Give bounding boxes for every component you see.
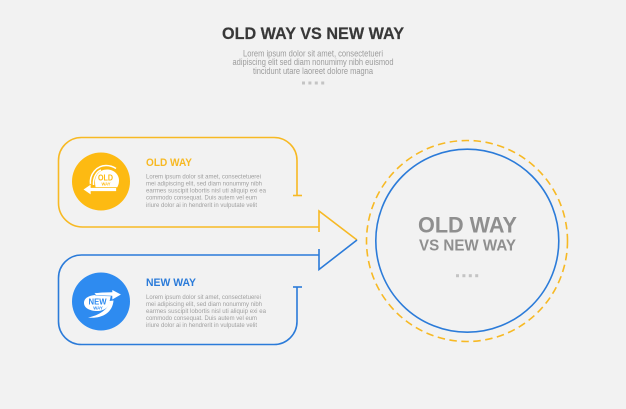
subtitle text block: tincidunt utare laoreet dolore magna <box>253 66 373 76</box>
icon: old way: OLD <box>98 173 113 182</box>
title: OLD WAY VS NEW WAY <box>222 24 405 43</box>
new way body text <box>146 294 266 329</box>
icon: old way: WAY <box>102 182 111 186</box>
old way body text: Lorem ipsum dolor sit amet, consectetuerei <box>146 174 261 180</box>
new way body text: commodo consequat. Duis autem vel eum <box>146 315 257 322</box>
old way body text: commodo consequat. Duis autem vel eum <box>146 195 257 202</box>
center label: OLD WAY <box>418 212 517 238</box>
solid inner circle <box>376 149 559 332</box>
new way body text: earmes suscipit lobortis nisl uti aliquip exi ea <box>146 308 266 315</box>
new way body text: mei adipiscing elit, sed diam nonummy nibh <box>146 301 262 308</box>
old way outline connector <box>58 138 319 227</box>
icon: old way <box>72 152 130 210</box>
new way body text: iriure dolor ai in hendrerit in vulputate velit <box>146 322 257 329</box>
arrow yellow half <box>319 211 357 240</box>
arrow blue half <box>319 240 357 270</box>
old way body text: earmes suscipit lobortis nisl uti aliquip exi ea <box>146 188 266 195</box>
subtitle text block <box>232 48 394 76</box>
center label: VS NEW WAY <box>419 238 516 254</box>
old way heading: OLD WAY <box>146 157 193 169</box>
center dots <box>456 274 478 277</box>
old way body text: mei adipiscing elit, sed diam nonummy nibh <box>146 180 262 188</box>
header dots <box>302 82 324 84</box>
new way outline connector <box>58 255 319 344</box>
new way body text: Lorem ipsum dolor sit amet, consectetuerei <box>146 294 261 301</box>
dashed outer circle <box>366 140 568 342</box>
subtitle text block: Lorem ipsum dolor sit amet, consectetueri <box>243 48 383 58</box>
icon: new way: WAY <box>93 306 103 310</box>
old way body text <box>146 174 266 209</box>
old way end cap <box>293 194 302 196</box>
old way body text: iriure dolor ai in hendrerit in vulputate velit <box>146 202 257 209</box>
new way end cap <box>293 286 302 288</box>
center label <box>418 212 517 254</box>
icon: new way <box>72 272 130 330</box>
new way heading: NEW WAY <box>146 277 197 289</box>
subtitle text block: adipiscing elit sed diam nonumimy nibh euismod <box>232 57 394 67</box>
icon: new way: NEW <box>88 298 107 306</box>
